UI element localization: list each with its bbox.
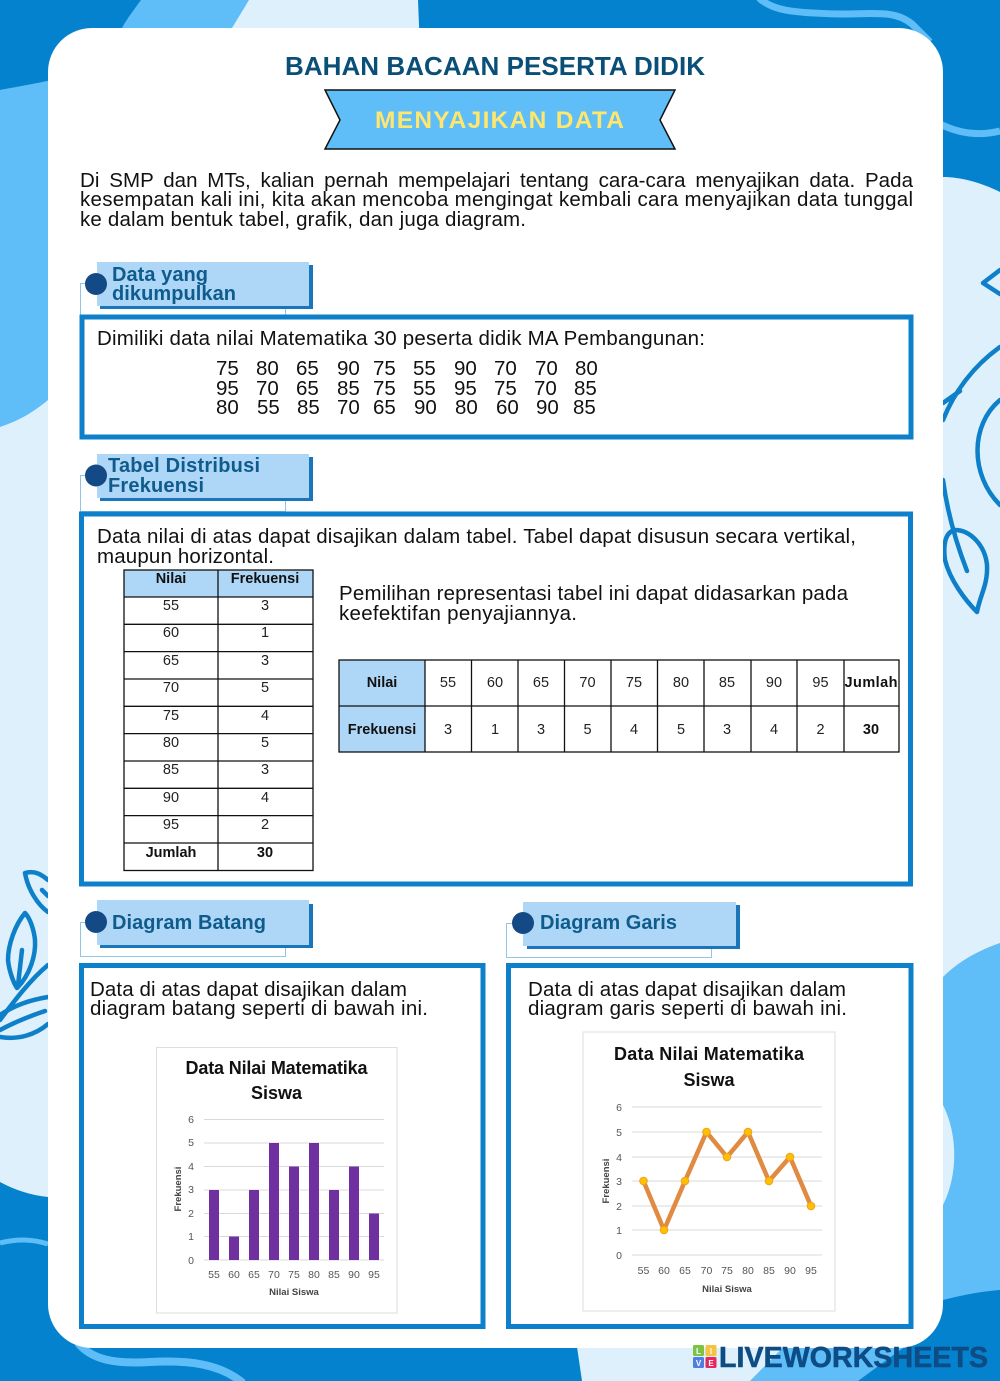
horizontal frequency table: 80 xyxy=(673,675,689,691)
panel: raw data: 90 xyxy=(454,357,477,380)
panel: raw data: 55 xyxy=(413,377,436,400)
side note xyxy=(339,582,849,625)
line chart: 80 xyxy=(742,1265,754,1277)
horizontal frequency table: 55 xyxy=(440,675,456,691)
horizontal frequency table: 4 xyxy=(770,722,778,738)
vertical frequency table: 80 xyxy=(163,735,179,751)
panel: raw data: 55 xyxy=(257,396,280,419)
bar chart: 85 xyxy=(328,1269,340,1281)
bar chart: Nilai Siswa xyxy=(269,1287,320,1298)
vertical frequency table: 75 xyxy=(163,708,179,724)
bar chart xyxy=(156,1048,397,1313)
line chart: Nilai Siswa xyxy=(702,1284,753,1295)
panel: bar chart xyxy=(82,966,483,1326)
horizontal frequency table: 90 xyxy=(766,675,782,691)
bar chart: 2 xyxy=(188,1208,194,1220)
vertical frequency table: 5 xyxy=(261,680,269,696)
horizontal frequency table: 65 xyxy=(533,675,549,691)
panel: raw data: 75 xyxy=(373,377,396,400)
bar chart: 60 xyxy=(228,1269,240,1281)
horizontal frequency table: 5 xyxy=(677,722,685,738)
logo: liveworksheets: E xyxy=(708,1359,714,1368)
line chart: 85 xyxy=(763,1265,775,1277)
horizontal frequency table: 30 xyxy=(863,722,879,738)
vertical frequency table: 4 xyxy=(261,790,269,806)
horizontal frequency table: 1 xyxy=(491,722,499,738)
panel: line chart xyxy=(508,966,911,1326)
icon: right leaves xyxy=(943,270,1000,612)
line chart: 70 xyxy=(701,1265,712,1277)
panel: raw data: 60 xyxy=(496,396,519,419)
line chart: 0 xyxy=(616,1250,622,1262)
vertical frequency table: 1 xyxy=(261,625,269,641)
horizontal frequency table: 4 xyxy=(630,722,638,738)
panel: tables xyxy=(82,514,910,884)
horizontal frequency table: 75 xyxy=(626,675,642,691)
bar chart: 75 xyxy=(288,1269,300,1281)
panel: raw data: 85 xyxy=(337,377,360,400)
panel: raw data: 70 xyxy=(534,377,557,400)
panel: raw data: Dimiliki data nilai Matematika 30 peserta didik MA Pembangunan: xyxy=(97,327,705,350)
panel: raw data: 85 xyxy=(573,396,596,419)
vertical frequency table: 55 xyxy=(163,598,179,614)
logo: liveworksheets: V xyxy=(696,1359,702,1368)
title: BAHAN BACAAN PESERTA DIDIK xyxy=(285,51,705,81)
vertical frequency table xyxy=(124,570,313,870)
horizontal frequency table: 95 xyxy=(812,675,829,691)
vertical frequency table: 5 xyxy=(261,735,269,751)
vertical frequency table: Nilai xyxy=(156,571,186,587)
intro paragraph: kesempatan kali ini, kita akan mencoba mengingat kembali cara menyajikan data tunggal xyxy=(80,188,913,211)
panel: raw data: 90 xyxy=(536,396,559,419)
line chart: 65 xyxy=(679,1265,691,1277)
vertical frequency table: 3 xyxy=(261,762,269,778)
line chart: 4 xyxy=(616,1152,622,1164)
panel: raw data: 70 xyxy=(256,377,279,400)
section: tabel distribusi frekuensi: Tabel Distribusi xyxy=(108,455,260,477)
section: diagram garis: Diagram Garis xyxy=(540,912,677,934)
bar chart: 6 xyxy=(188,1114,194,1126)
bar chart: 5 xyxy=(188,1137,194,1149)
panel: raw data: 95 xyxy=(454,377,477,400)
section: tabel distribusi frekuensi xyxy=(80,454,910,884)
panel: raw data: 75 xyxy=(494,377,517,400)
line chart: 2 xyxy=(616,1201,622,1213)
bar chart: 65 xyxy=(248,1269,260,1281)
vertical frequency table: 95 xyxy=(163,817,179,833)
side note: keefektifan penyajiannya. xyxy=(339,602,577,625)
panel: raw data: 90 xyxy=(337,357,360,380)
panel: raw data xyxy=(82,317,911,437)
vertical frequency table: 65 xyxy=(163,653,179,669)
panel: raw data: 80 xyxy=(256,357,279,380)
bar chart: 3 xyxy=(188,1184,194,1196)
bar chart: Siswa xyxy=(251,1083,303,1103)
line chart: 90 xyxy=(784,1265,796,1277)
vertical frequency table: 85 xyxy=(163,762,179,778)
icon: left leaves xyxy=(0,872,48,1038)
section: tabel distribusi frekuensi: Frekuensi xyxy=(108,475,204,497)
bar chart: 70 xyxy=(268,1269,280,1281)
bar chart: Frekuensi xyxy=(173,1167,184,1211)
horizontal frequency table: 2 xyxy=(816,722,825,738)
line chart: 95 xyxy=(805,1265,817,1277)
section: data yang dikumpulkan: dikumpulkan xyxy=(112,283,236,305)
vertical frequency table: Frekuensi xyxy=(231,571,299,587)
bar chart: 90 xyxy=(348,1269,360,1281)
bar chart: 4 xyxy=(188,1161,194,1173)
bar chart: 95 xyxy=(368,1269,380,1281)
logo: liveworksheets: L xyxy=(696,1347,701,1356)
section: data yang dikumpulkan: Data yang xyxy=(112,264,208,286)
side note: Pemilihan representasi tabel ini dapat didasarkan pada xyxy=(339,582,849,605)
panel: line chart: Data di atas dapat disajikan dalam xyxy=(528,978,846,1001)
vertical frequency table: 70 xyxy=(163,680,179,696)
vertical frequency table: 2 xyxy=(261,817,269,833)
ribbon banner: MENYAJIKAN DATA xyxy=(375,107,624,134)
intro paragraph: Di SMP dan MTs, kalian pernah mempelajari tentang cara-cara menyajikan data. Pada xyxy=(80,169,914,192)
vertical frequency table: Jumlah xyxy=(146,845,196,861)
intro paragraph: ke dalam bentuk tabel, grafik, dan juga diagram. xyxy=(80,208,526,231)
panel: raw data: 85 xyxy=(574,377,597,400)
horizontal frequency table: Frekuensi xyxy=(348,722,416,738)
panel: raw data: 80 xyxy=(575,357,598,380)
panel: raw data: 70 xyxy=(337,396,360,419)
section: data yang dikumpulkan xyxy=(80,262,911,437)
horizontal frequency table: 60 xyxy=(487,675,503,691)
vertical frequency table: 3 xyxy=(261,598,269,614)
horizontal frequency table: 70 xyxy=(579,675,596,691)
intro paragraph xyxy=(80,169,914,231)
section: diagram batang: Diagram Batang xyxy=(112,912,266,934)
bar chart: 0 xyxy=(188,1255,194,1267)
panel: raw data: 80 xyxy=(455,396,478,419)
horizontal frequency table: Nilai xyxy=(367,675,397,691)
logo: liveworksheets: LIVEWORKSHEETS xyxy=(719,1342,988,1374)
panel: raw data: 95 xyxy=(216,377,239,400)
line chart: Data Nilai Matematika xyxy=(614,1044,805,1064)
bar chart: Data Nilai Matematika xyxy=(186,1058,368,1078)
section: diagram batang xyxy=(80,900,483,1326)
vertical frequency table: 60 xyxy=(163,625,179,641)
panel: bar chart: diagram batang seperti di bawah ini. xyxy=(90,997,428,1020)
bar chart: 80 xyxy=(308,1269,320,1281)
line chart: 1 xyxy=(616,1225,622,1237)
line chart: 60 xyxy=(658,1265,670,1277)
vertical frequency table: 4 xyxy=(261,708,269,724)
panel: tables: maupun horizontal. xyxy=(97,545,274,568)
vertical frequency table: 30 xyxy=(257,845,273,861)
ribbon banner xyxy=(325,90,675,149)
panel: raw data: 90 xyxy=(414,396,437,419)
panel: raw data: 65 xyxy=(296,377,319,400)
line chart: 55 xyxy=(638,1265,649,1277)
panel: raw data: 55 xyxy=(413,357,436,380)
panel: raw data: 70 xyxy=(535,357,558,380)
line chart: 75 xyxy=(721,1265,733,1277)
horizontal frequency table: Jumlah xyxy=(844,675,898,691)
horizontal frequency table: 85 xyxy=(719,675,735,691)
horizontal frequency table: 3 xyxy=(537,722,545,738)
horizontal frequency table: 5 xyxy=(583,722,592,738)
horizontal frequency table: 3 xyxy=(444,722,452,738)
panel: raw data: 85 xyxy=(297,396,320,419)
panel: raw data: 65 xyxy=(296,357,319,380)
line chart: 6 xyxy=(616,1102,622,1114)
panel: bar chart: Data di atas dapat disajikan dalam xyxy=(90,978,407,1001)
horizontal frequency table xyxy=(339,660,899,752)
bar chart: 55 xyxy=(208,1269,220,1281)
line chart xyxy=(583,1032,835,1311)
bar chart: 1 xyxy=(188,1231,194,1243)
line chart: 3 xyxy=(616,1176,622,1188)
section: diagram garis xyxy=(506,902,911,1326)
panel: line chart: diagram garis seperti di bawah ini. xyxy=(528,997,847,1020)
vertical frequency table: 90 xyxy=(163,790,179,806)
logo: liveworksheets: I xyxy=(710,1347,712,1356)
line chart: Siswa xyxy=(683,1070,736,1090)
line chart: Frekuensi xyxy=(601,1159,612,1203)
vertical frequency table: 3 xyxy=(261,653,269,669)
panel: raw data: 75 xyxy=(216,357,239,380)
panel: raw data: 75 xyxy=(373,357,396,380)
panel: raw data: 70 xyxy=(494,357,517,380)
panel: tables: Data nilai di atas dapat disajikan dalam tabel. Tabel dapat disusun secara vertikal, xyxy=(97,525,856,548)
panel: raw data: 65 xyxy=(373,396,396,419)
line chart: 5 xyxy=(616,1127,622,1139)
horizontal frequency table: 3 xyxy=(723,722,731,738)
panel: raw data: 80 xyxy=(216,396,239,419)
